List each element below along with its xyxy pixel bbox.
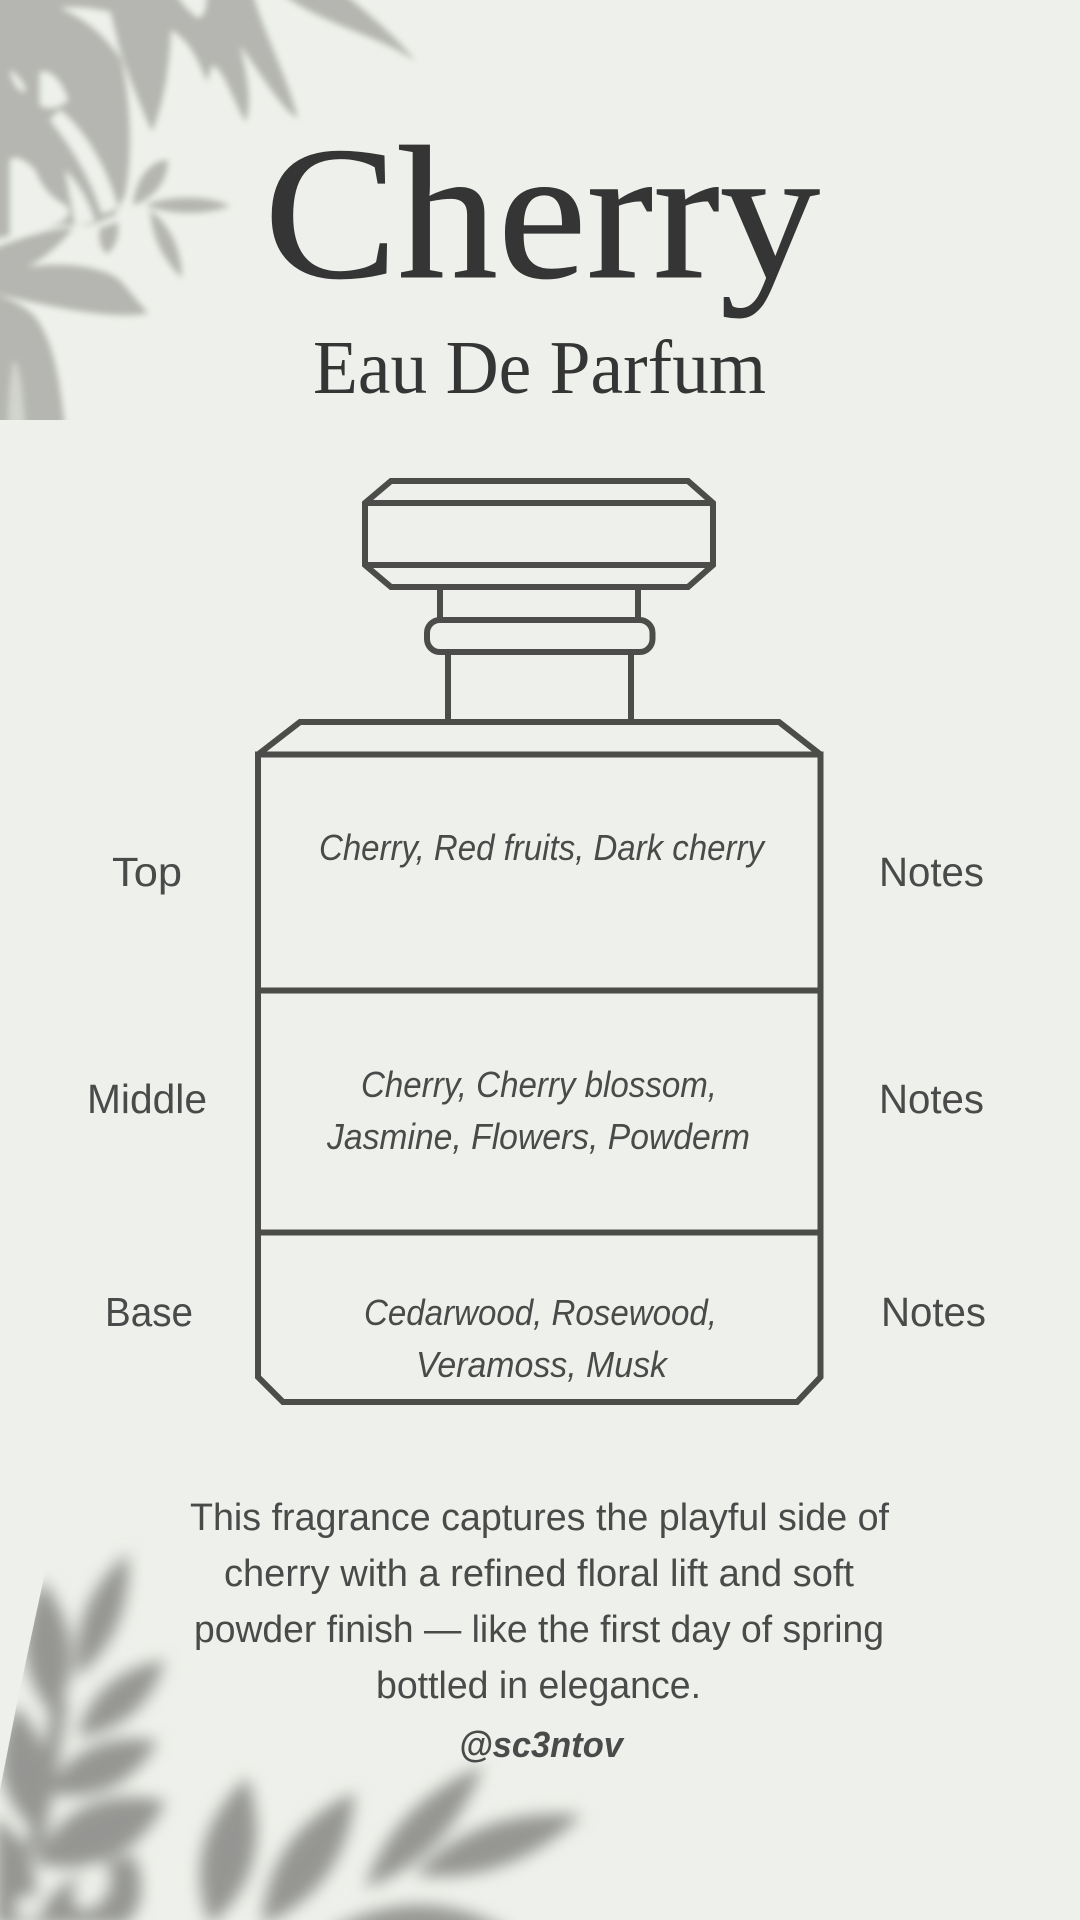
perfume bottle outline [258, 481, 820, 1402]
label: Middle: Middle [87, 1076, 207, 1122]
label: Top: Top [112, 849, 182, 895]
description paragraph: cherry with a refined floral lift and soft [224, 1553, 854, 1595]
base notes list [364, 1292, 717, 1385]
base notes list: Cedarwood, Rosewood, [364, 1292, 717, 1333]
title: Cherry: Cherry [264, 109, 820, 319]
middle notes list [326, 1064, 750, 1157]
label: Base: Base [105, 1289, 193, 1335]
top notes row [112, 827, 984, 895]
upper neck [440, 587, 638, 620]
leaf shadow: top left [0, 0, 416, 430]
label: Notes: Notes [879, 1076, 984, 1122]
label: Notes: Notes [881, 1289, 986, 1335]
social handle: @sc3ntov [459, 1724, 625, 1765]
bottle body with note dividers [258, 754, 820, 1402]
middle notes list: Cherry, Cherry blossom, [361, 1064, 717, 1105]
middle notes row [87, 1064, 984, 1157]
subtitle: Eau De Parfum: Eau De Parfum [313, 326, 766, 410]
bottle cap [365, 481, 713, 587]
description paragraph [190, 1497, 889, 1707]
description paragraph: powder finish — like the first day of spring [194, 1609, 884, 1651]
label: Notes: Notes [879, 849, 984, 895]
description paragraph: This fragrance captures the playful side of [190, 1497, 889, 1539]
shoulder [258, 722, 820, 754]
neck ring [427, 620, 652, 652]
base notes row [105, 1289, 986, 1385]
leaf shadow: bottom left [0, 1553, 582, 1920]
lower neck [448, 652, 631, 722]
description paragraph: bottled in elegance. [376, 1665, 701, 1707]
middle notes list: Jasmine, Flowers, Powderm [326, 1116, 750, 1157]
base notes list: Veramoss, Musk [416, 1344, 669, 1385]
top notes list: Cherry, Red fruits, Dark cherry [319, 827, 766, 868]
